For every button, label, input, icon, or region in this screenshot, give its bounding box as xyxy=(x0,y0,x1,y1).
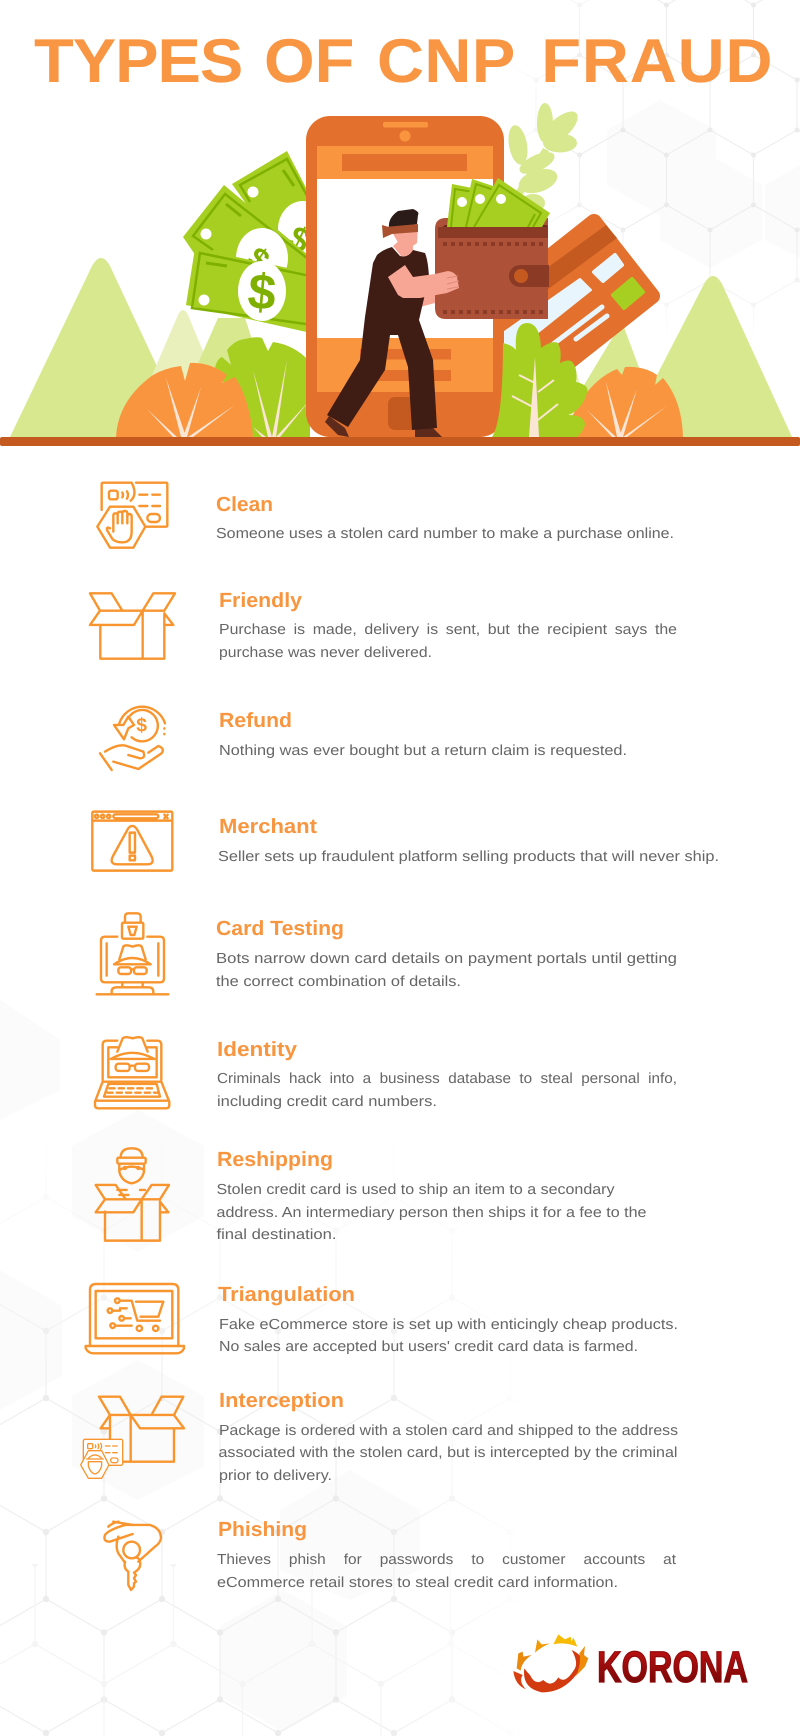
right bushes xyxy=(492,323,683,437)
banknotes: $ xyxy=(282,219,316,261)
description xyxy=(216,951,677,990)
wordmark: KORONA xyxy=(597,1643,748,1692)
description xyxy=(216,1182,646,1243)
icon: monitor with lock and spy xyxy=(97,913,168,994)
title: CNP xyxy=(377,27,516,96)
item: Clean xyxy=(97,483,674,548)
description: final destination. xyxy=(216,1227,336,1243)
description: purchase was never delivered. xyxy=(219,645,432,661)
item: Card Testing xyxy=(97,913,677,994)
icon: flame ring xyxy=(513,1634,588,1692)
description: address. An intermediary person then ships it for a fee to the xyxy=(216,1205,646,1221)
description xyxy=(217,1552,676,1591)
heading: Reshipping xyxy=(217,1148,333,1171)
smartphone xyxy=(306,116,504,437)
icon: laptop with shopping cart xyxy=(86,1284,184,1353)
item: Refund xyxy=(100,707,627,770)
banknotes: $ xyxy=(246,263,278,321)
mountains xyxy=(10,258,792,437)
heading: Interception xyxy=(219,1389,344,1412)
description: including credit card numbers. xyxy=(217,1094,437,1110)
wallet with cash xyxy=(435,178,550,319)
icon: open box xyxy=(90,593,175,659)
credit card xyxy=(465,222,652,398)
item: Friendly xyxy=(90,589,677,661)
left bushes xyxy=(116,337,310,437)
item: Interception xyxy=(81,1389,678,1484)
title: OF xyxy=(264,27,354,96)
heading: Refund xyxy=(219,709,292,732)
icon: hand holding key xyxy=(104,1522,161,1590)
heading: Clean xyxy=(216,493,273,516)
heading: Friendly xyxy=(219,589,303,612)
description xyxy=(219,622,677,661)
item: Merchant xyxy=(92,812,719,871)
description: Purchase is made, delivery is sent, but the recipient says the xyxy=(219,622,677,638)
title: TYPES xyxy=(34,27,242,96)
description: Someone uses a stolen card number to make a purchase online. xyxy=(216,526,674,542)
description: associated with the stolen card, but is intercepted by the criminal xyxy=(218,1445,678,1461)
title: FRAUD xyxy=(541,27,773,96)
icon: laptop with spy xyxy=(95,1037,169,1108)
description xyxy=(217,1071,677,1110)
item: Triangulation xyxy=(86,1283,678,1355)
logo: Korona xyxy=(513,1634,748,1692)
icon: refund hand and coin xyxy=(100,707,165,770)
description: Seller sets up fraudulent platform selling products that will never ship. xyxy=(218,849,719,865)
heading: Identity xyxy=(217,1038,298,1061)
description: Criminals hack into a business database to steal personal info, xyxy=(217,1071,677,1087)
plant xyxy=(503,103,583,214)
description: Thieves phish for passwords to customer accounts at xyxy=(217,1552,676,1568)
heading: Phishing xyxy=(218,1518,307,1541)
icon: robber in box xyxy=(96,1148,169,1241)
icon: browser warning xyxy=(92,812,172,871)
description: Stolen credit card is used to ship an item to a secondary xyxy=(216,1182,615,1198)
description: No sales are accepted but users' credit card data is farmed. xyxy=(219,1339,638,1355)
banknotes: $ xyxy=(241,239,276,279)
description xyxy=(219,1317,678,1355)
banknotes xyxy=(183,151,328,335)
icon: refund hand and coin: $ xyxy=(136,714,147,736)
item: Reshipping xyxy=(96,1148,647,1243)
hero illustration xyxy=(0,103,800,446)
description: the correct combination of details. xyxy=(216,974,461,990)
heading: Card Testing xyxy=(216,917,344,940)
ground bar xyxy=(0,437,800,446)
heading: Merchant xyxy=(219,815,317,838)
icon: box with card and thief xyxy=(81,1397,184,1478)
description: prior to delivery. xyxy=(219,1468,332,1484)
icon: card with stop hand xyxy=(97,483,167,548)
description: Package is ordered with a stolen card and shipped to the address xyxy=(219,1423,678,1439)
masked thief xyxy=(325,209,459,437)
description xyxy=(218,1423,678,1484)
description: eCommerce retail stores to steal credit card information. xyxy=(217,1575,618,1591)
item: Phishing xyxy=(104,1518,676,1591)
description: Nothing was ever bought but a return claim is requested. xyxy=(219,743,627,759)
description: Fake eCommerce store is set up with enticingly cheap products. xyxy=(219,1317,678,1333)
description: Bots narrow down card details on payment portals until getting xyxy=(216,951,677,967)
item: Identity xyxy=(95,1037,677,1110)
heading: Triangulation xyxy=(218,1283,355,1306)
